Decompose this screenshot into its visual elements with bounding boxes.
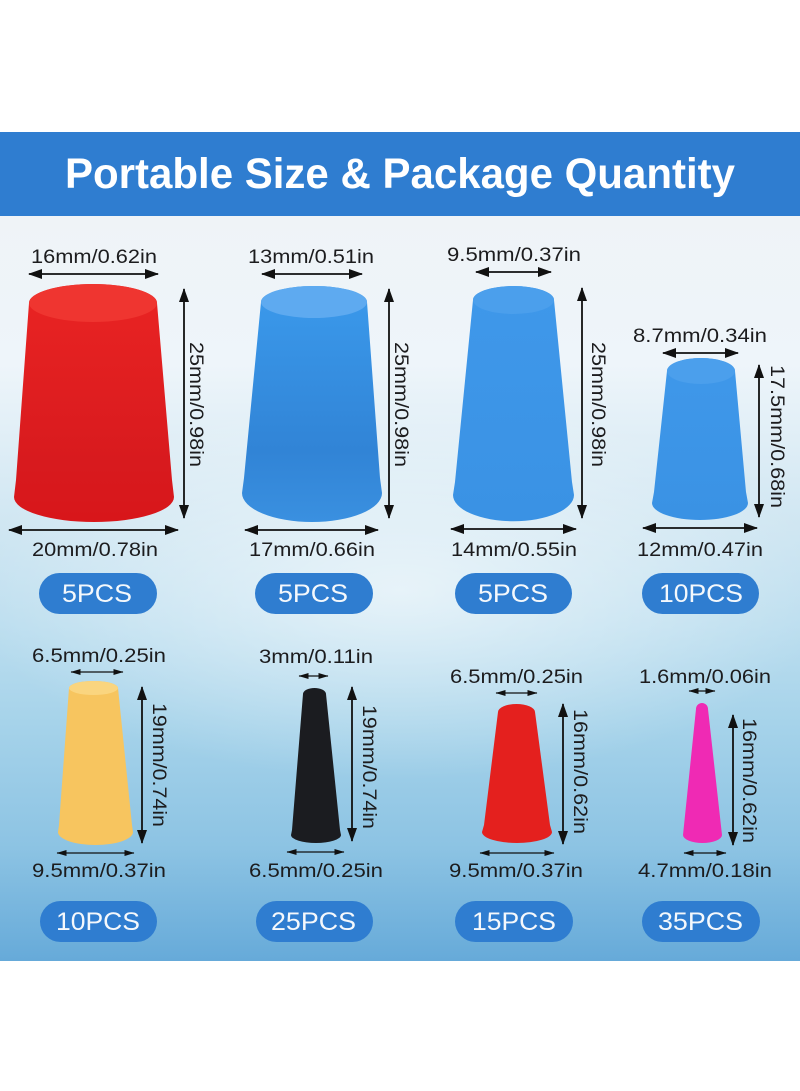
quantity badge 5PCS: 5PCS [478, 580, 548, 608]
title banner [0, 132, 800, 216]
quantity badge 10PCS [642, 573, 759, 614]
dimensions [249, 647, 383, 882]
dimensions: 8.7mm/0.34in [633, 326, 767, 347]
dimensions: 19mm/0.74in [358, 705, 379, 829]
dimensions [32, 646, 169, 882]
dimensions: 25mm/0.98in [587, 342, 608, 467]
stopper 6: black [249, 647, 383, 882]
dimensions: 4.7mm/0.18in [638, 861, 772, 882]
dimensions: 9.5mm/0.37in [447, 245, 581, 266]
dimensions: 3mm/0.11in [259, 647, 373, 668]
quantity badge 10PCS: 10PCS [659, 580, 743, 608]
dimensions: 19mm/0.74in [148, 703, 169, 827]
dimensions: 6.5mm/0.25in [249, 861, 383, 882]
quantity badge 15PCS: 15PCS [472, 908, 556, 936]
dimensions: 16mm/0.62in [569, 709, 590, 834]
quantity badge 25PCS [256, 901, 373, 942]
dimensions [638, 667, 772, 882]
stopper 3: blue [447, 245, 608, 561]
quantity badge 25PCS: 25PCS [271, 908, 356, 936]
dimensions: 1.6mm/0.06in [639, 667, 771, 688]
stopper 4: small blue [633, 326, 787, 561]
dimensions [449, 667, 590, 882]
dimensions [447, 245, 608, 561]
stopper 7: small red [449, 667, 590, 882]
dimensions [633, 326, 787, 561]
quantity badge 5PCS: 5PCS [278, 580, 348, 608]
quantity badge 10PCS [40, 901, 157, 942]
title: Portable Size & Package Quantity [65, 150, 735, 198]
stopper 5: yellow [32, 646, 169, 882]
dimensions: 6.5mm/0.25in [450, 667, 583, 688]
quantity badge 35PCS: 35PCS [658, 908, 743, 936]
background panel [0, 215, 800, 961]
quantity badge 5PCS [39, 573, 157, 614]
dimensions: 9.5mm/0.37in [32, 861, 166, 882]
stopper 1: large red [9, 247, 206, 561]
stopper 8: pink [638, 667, 772, 882]
dimensions: 16mm/0.62in [738, 718, 759, 843]
quantity badge 5PCS [255, 573, 373, 614]
quantity badge 5PCS [455, 573, 572, 614]
dimensions: 14mm/0.55in [451, 540, 577, 561]
dimensions: 17.5mm/0.68in [766, 365, 787, 508]
dimensions: 17mm/0.66in [249, 540, 375, 561]
dimensions: 25mm/0.98in [185, 342, 206, 467]
dimensions: 20mm/0.78in [32, 540, 158, 561]
quantity badge 5PCS: 5PCS [62, 580, 132, 608]
dimensions [245, 247, 411, 561]
stopper 2: blue [242, 247, 411, 561]
dimensions: 25mm/0.98in [390, 342, 411, 467]
dimensions: 13mm/0.51in [248, 247, 374, 268]
quantity badge 10PCS: 10PCS [56, 908, 140, 936]
dimensions: 12mm/0.47in [637, 540, 763, 561]
quantity badge 35PCS [642, 901, 760, 942]
dimensions: 16mm/0.62in [31, 247, 157, 268]
dimensions: 9.5mm/0.37in [449, 861, 583, 882]
dimensions: 6.5mm/0.25in [32, 646, 166, 667]
quantity badge 15PCS [455, 901, 573, 942]
dimensions [9, 247, 206, 561]
